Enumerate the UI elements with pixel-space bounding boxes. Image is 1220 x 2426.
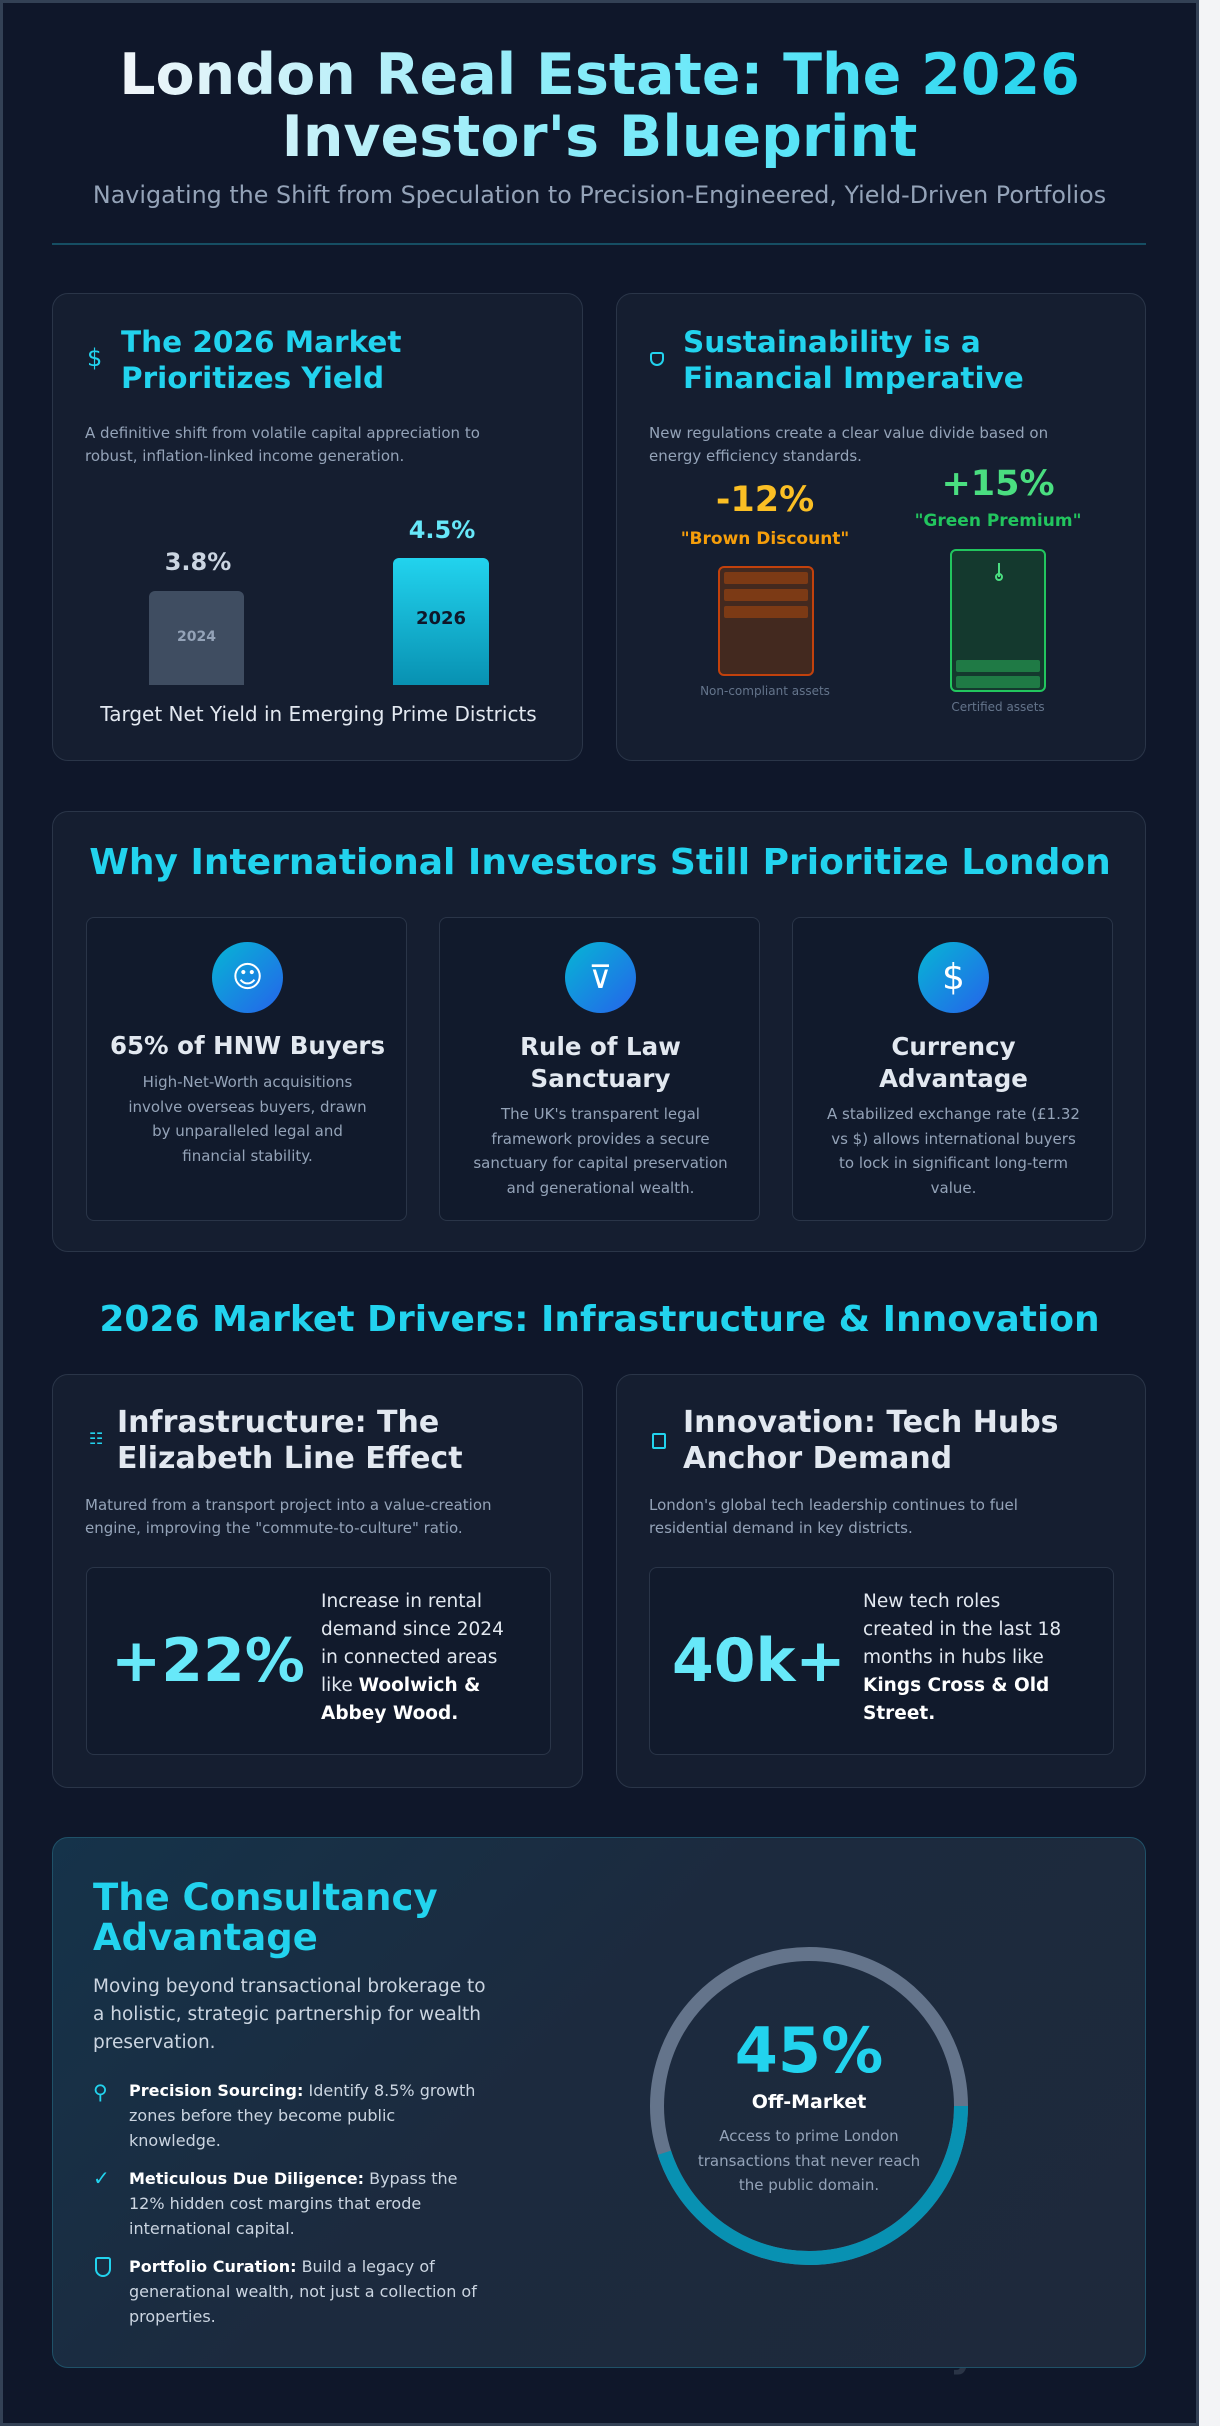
heading: The Consultancy xyxy=(93,1876,438,1919)
card: currency: Advantage xyxy=(879,1064,1028,1093)
panel: why international investors xyxy=(52,811,1146,1252)
stat box xyxy=(86,1567,551,1755)
bullet list: ⚲ xyxy=(93,2080,108,2104)
bullet list: Precision Sourcing: Identify 8.5% growth zones before they become public knowledge. xyxy=(129,2081,475,2150)
card: rule of law: Sanctuary xyxy=(531,1064,670,1093)
heading xyxy=(117,1405,463,1476)
description: New regulations create a clear value divide based on energy efficiency standards. xyxy=(649,424,1048,465)
description: A definitive shift from volatile capital appreciation to robust, inflation-linked income generation. xyxy=(85,424,480,465)
heading: Infrastructure: The xyxy=(117,1405,439,1440)
icon: dollar: $ xyxy=(942,957,965,998)
green premium xyxy=(915,464,1081,714)
stat box: New tech roles created in the last 18 months in hubs like Kings Cross & Old Street. xyxy=(863,1591,1061,1724)
bar chart: 4.5% xyxy=(409,516,475,544)
bar chart xyxy=(149,516,489,685)
section heading: Why International Investors Still Prioritize London xyxy=(89,842,1111,883)
heading xyxy=(121,325,402,395)
icon: users: ☺ xyxy=(232,960,263,995)
bullet: portfolio curation xyxy=(95,2257,478,2326)
icon: scales: ⊽ xyxy=(589,958,612,996)
description: Moving beyond transactional brokerage to a holistic, strategic partnership for wealth preservation. xyxy=(93,1976,486,2053)
bullet list: Portfolio Curation: Build a legacy of generational wealth, not just a collection of properties. xyxy=(129,2257,477,2326)
heading: The 2026 Market xyxy=(121,325,402,359)
brown discount xyxy=(681,480,849,698)
card: HNW buyers xyxy=(86,917,407,1221)
bullet: precision sourcing xyxy=(93,2080,475,2150)
panel: sustainability xyxy=(616,293,1146,761)
card: rule of law xyxy=(439,917,760,1221)
green premium: Certified assets xyxy=(951,700,1045,714)
brown discount: "Brown Discount" xyxy=(681,529,849,549)
section heading: market drivers: 2026 Market Drivers: Infrastructure & Innovation xyxy=(99,1299,1100,1340)
card: HNW buyers: 65% of HNW Buyers xyxy=(110,1031,385,1060)
heading: Sustainability is a xyxy=(683,325,981,359)
heading: Elizabeth Line Effect xyxy=(117,1441,463,1476)
stat box: 40k+ xyxy=(672,1626,846,1696)
icon: train: ☷ xyxy=(89,1429,103,1448)
icon: dollar xyxy=(918,942,989,1013)
heading: Innovation: Tech Hubs xyxy=(683,1405,1059,1440)
bar chart: 3.8% xyxy=(165,548,231,576)
watermark: yfluence xyxy=(950,2330,1141,2376)
brown discount: Non-compliant assets xyxy=(700,684,830,698)
brown discount: -12% xyxy=(716,480,814,520)
ring chart: Access to prime London transactions that never reach the public domain. xyxy=(698,2127,920,2194)
heading: Financial Imperative xyxy=(683,361,1024,395)
bullet list xyxy=(93,2080,478,2326)
panel: infrastructure xyxy=(52,1374,583,1788)
stat box: Increase in rental demand since 2024 in connected areas like Woolwich & Abbey Wood. xyxy=(321,1591,504,1724)
panel: consultancy advantage xyxy=(52,1837,1146,2368)
bullet: due diligence xyxy=(93,2166,458,2238)
ring chart: 45% xyxy=(735,2014,883,2087)
subtitle: Navigating the Shift from Speculation to Precision-Engineered, Yield-Driven Portfolios xyxy=(93,181,1106,209)
card: rule of law: Rule of Law xyxy=(520,1032,681,1061)
green premium: "Green Premium" xyxy=(915,511,1081,531)
icon: scales xyxy=(565,942,636,1013)
heading xyxy=(683,1405,1059,1476)
ring chart xyxy=(650,1947,968,2265)
description: London's global tech leadership continues to fuel residential demand in key districts. xyxy=(649,1496,1018,1537)
bar chart: 2024 xyxy=(177,629,216,645)
card: rule of law: The UK's transparent legal framework provides a secure sanctuary for capital preservation and generational wealth. xyxy=(473,1105,728,1196)
icon: dollar: $ xyxy=(87,344,102,372)
icon: users xyxy=(212,942,283,1013)
stat box xyxy=(649,1567,1114,1755)
heading xyxy=(93,1876,438,1959)
icon: leaf xyxy=(650,352,664,366)
ring chart: Off-Market xyxy=(752,2091,866,2113)
card: currency: A stabilized exchange rate (£1.32 vs $) allows international buyers to lock in significant long-term value. xyxy=(827,1105,1080,1196)
heading xyxy=(683,325,1024,395)
description: Matured from a transport project into a value-creation engine, improving the "commute-to-culture" ratio. xyxy=(85,1496,492,1537)
bullet list: ✓ xyxy=(93,2166,110,2190)
heading: Advantage xyxy=(93,1916,318,1959)
title xyxy=(0,44,1199,168)
icon: brown building xyxy=(718,566,814,676)
icon: green building xyxy=(950,549,1046,692)
card: HNW buyers: High-Net-Worth acquisitions involve overseas buyers, drawn by unparalleled legal and financial stability. xyxy=(128,1073,367,1164)
caption: Target Net Yield in Emerging Prime Districts xyxy=(100,702,537,726)
stat box: +22% xyxy=(111,1626,305,1696)
card: currency: Currency xyxy=(891,1032,1016,1061)
green premium: +15% xyxy=(941,464,1055,504)
panel: innovation xyxy=(616,1374,1146,1788)
bar chart: 2026 xyxy=(416,608,466,629)
title: Investor's Blueprint xyxy=(282,104,917,170)
title: London Real Estate: The 2026 xyxy=(119,42,1080,108)
bullet list: Meticulous Due Diligence: Bypass the 12% hidden cost margins that erode international capital. xyxy=(129,2169,458,2238)
heading: Anchor Demand xyxy=(683,1441,952,1476)
panel: market prioritizes yield xyxy=(52,293,583,761)
icon: chip xyxy=(652,1433,666,1449)
heading: Prioritizes Yield xyxy=(121,361,384,395)
card: currency xyxy=(792,917,1113,1221)
